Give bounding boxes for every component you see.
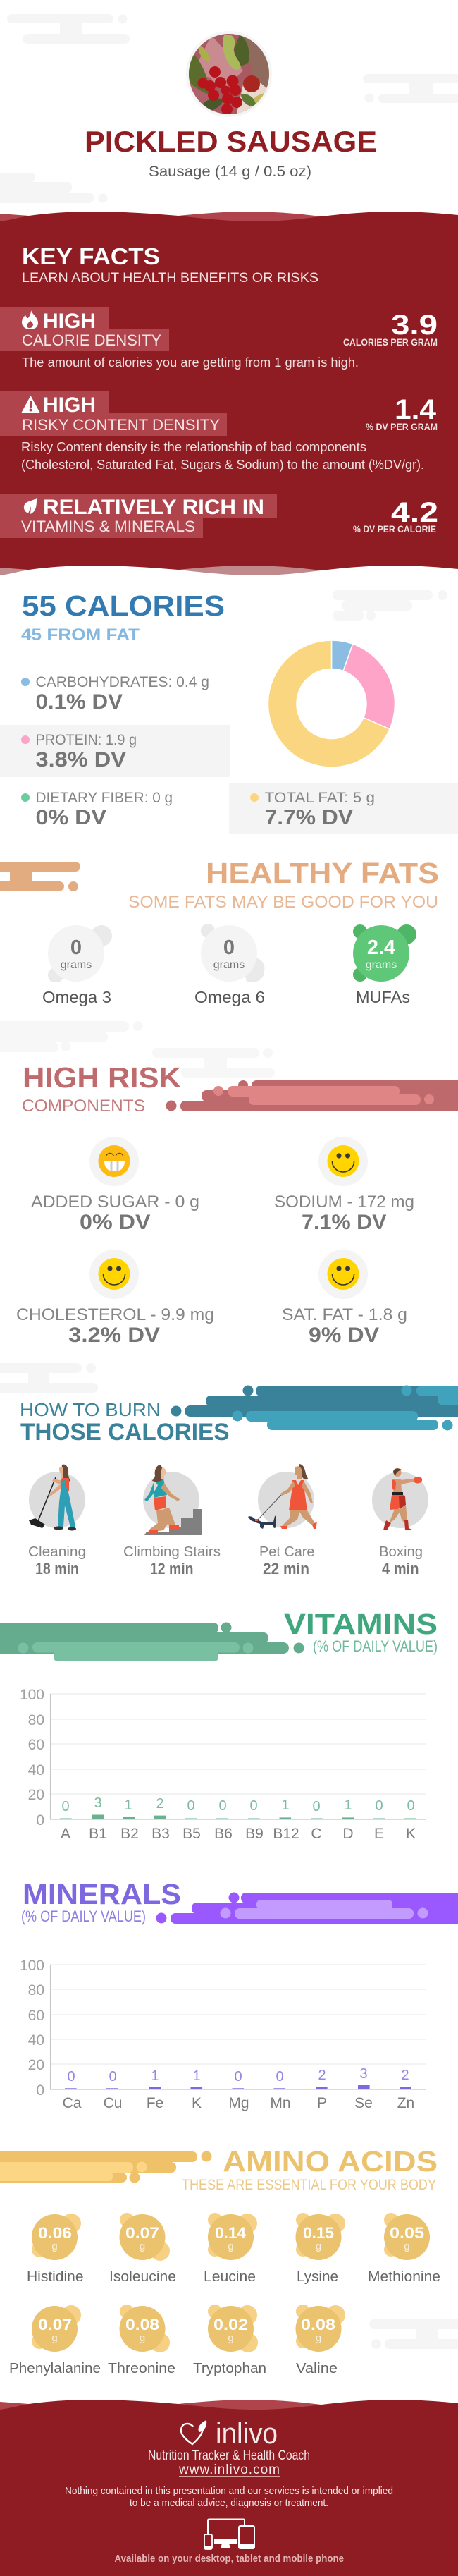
vitamins bar chart: K (406, 1826, 416, 1842)
vitamins bar chart: B5 (182, 1826, 201, 1842)
amino: tryptophan: Tryptophan (193, 2361, 266, 2376)
burn heading (20, 1399, 230, 1446)
vitamins bar chart: 0 (407, 1798, 415, 1814)
macronutrient: total fat (229, 783, 458, 834)
minerals bar chart: Se (354, 2095, 373, 2111)
amino: histidine: Histidine (27, 2269, 83, 2285)
vitamins bar chart: B9 (245, 1826, 264, 1842)
title: PICKLED SAUSAGE (85, 125, 377, 158)
fact: calorie density (0, 307, 438, 370)
sodium (274, 1137, 414, 1234)
cholesterol: CHOLESTEROL - 9.9 mg (16, 1305, 214, 1324)
fact: risky content density: % DV PER GRAM (366, 421, 438, 432)
fact: risky content density: 1.4 (395, 394, 437, 425)
fact: vitamins and minerals richness: VITAMINS & MINERALS (21, 518, 195, 535)
macronutrient: dietary fiber: DIETARY FIBER: 0 g (35, 790, 173, 806)
omega 6: 0 (223, 936, 235, 959)
vitamins bar chart: B2 (120, 1826, 139, 1842)
header background clouds (0, 14, 458, 203)
website link: www.inlivo.com (178, 2462, 280, 2477)
amino: tryptophan: 0.02 (213, 2316, 248, 2333)
fact: vitamins and minerals richness: % DV PER CALORIE (353, 523, 436, 535)
amino: methionine: Methionine (368, 2269, 440, 2285)
vitamins bar chart: 40 (28, 1762, 44, 1778)
vitamins bar chart: 0 (218, 1798, 227, 1814)
minerals bar chart (20, 1958, 426, 2111)
minerals bar chart: 100 (20, 1958, 44, 1974)
vitamins bar chart: B6 (214, 1826, 233, 1842)
amino acids heading (182, 2145, 438, 2193)
minerals bar chart: K (192, 2095, 202, 2111)
added sugar: ADDED SUGAR - 0 g (31, 1192, 199, 1211)
minerals bar chart: Fe (147, 2095, 163, 2111)
amino: leucine (204, 2213, 257, 2285)
key facts heading (22, 243, 318, 286)
vitamins bar chart: 100 (20, 1687, 44, 1703)
inlivo logo: inlivo (216, 2417, 278, 2450)
omega 3: 0 (70, 936, 82, 959)
amino: leucine: 0.14 (215, 2224, 247, 2242)
burn section background cloud (0, 1363, 98, 1393)
availability note: Available on your desktop, tablet and mobile phone (114, 2553, 344, 2565)
macronutrient: carbohydrates (21, 674, 209, 714)
amino: tryptophan: g (228, 2332, 234, 2344)
MUFAs: grams (366, 959, 397, 971)
fact: vitamins and minerals richness (0, 494, 438, 538)
activity: boxing: 4 min (382, 1560, 419, 1577)
sodium: SODIUM - 172 mg (274, 1192, 414, 1211)
vitamins bar chart: 1 (124, 1797, 132, 1813)
amino: isoleucine (109, 2213, 176, 2285)
amino acids heading: AMINO ACIDS (223, 2145, 438, 2178)
activity: climbing stairs: 12 min (150, 1560, 193, 1577)
burn heading: HOW TO BURN (20, 1399, 161, 1420)
amino: valine: g (316, 2332, 321, 2344)
vitamins bar chart: 60 (28, 1737, 44, 1753)
inlivo logo (181, 2417, 278, 2450)
MUFAs (353, 924, 416, 1006)
panel: footer (0, 2400, 458, 2576)
amino: threonine: g (140, 2332, 145, 2344)
amino: threonine: 0.08 (125, 2316, 159, 2333)
amino: phenylalanine: 0.07 (38, 2316, 72, 2333)
minerals bar chart: 60 (28, 2008, 44, 2024)
cholesterol (16, 1250, 214, 1347)
activity: boxing (372, 1468, 428, 1577)
minerals bar chart: 0 (109, 2069, 117, 2084)
activity: climbing stairs: Climbing Stairs (123, 1544, 221, 1560)
saturated fat (282, 1250, 407, 1347)
macronutrient: total fat: TOTAL FAT: 5 g (265, 790, 375, 806)
macronutrient: dietary fiber: 0% DV (35, 806, 106, 829)
fact: calorie density: 3.9 (391, 310, 438, 341)
minerals bar chart: 1 (192, 2068, 201, 2084)
high risk heading (22, 1061, 181, 1116)
amino: lysine: Lysine (297, 2269, 338, 2285)
cholesterol: 3.2% DV (68, 1324, 160, 1347)
amino: phenylalanine: Phenylalanine (9, 2361, 101, 2376)
amino: isoleucine: g (140, 2240, 145, 2252)
minerals banner cloud (156, 1893, 458, 1924)
macronutrient: protein: PROTEIN: 1.9 g (35, 732, 137, 748)
fact: vitamins and minerals richness: 4.2 (391, 497, 438, 528)
panel: key facts (0, 212, 458, 594)
fact: calorie density: CALORIES PER GRAM (343, 336, 438, 348)
activity: pet care: Pet Care (259, 1544, 314, 1560)
amino: leucine: g (228, 2240, 234, 2252)
vitamins bar chart: 0 (312, 1799, 321, 1814)
minerals bar chart: 0 (234, 2069, 242, 2084)
vitamins heading: VITAMINS (284, 1608, 438, 1640)
omega 3: grams (61, 959, 92, 971)
omega 3: Omega 3 (42, 988, 111, 1006)
minerals heading: MINERALS (23, 1878, 181, 1910)
activity: pet care (248, 1464, 317, 1577)
minerals bar chart: 0 (67, 2069, 75, 2084)
activity: climbing stairs (123, 1465, 221, 1577)
MUFAs: 2.4 (367, 936, 395, 959)
minerals bar chart: 3 (359, 2066, 368, 2082)
added sugar: 0% DV (80, 1211, 151, 1234)
panel: high risk components (16, 1061, 458, 1347)
vitamins bar chart: B1 (89, 1826, 107, 1842)
vitamins bar chart: 0 (187, 1798, 195, 1814)
amino: histidine: 0.06 (38, 2224, 72, 2242)
panel: how to burn calories (20, 1385, 458, 1577)
panel: amino acids (0, 2145, 458, 2376)
activity: cleaning: Cleaning (28, 1544, 86, 1560)
saturated fat: SAT. FAT - 1.8 g (282, 1305, 407, 1324)
macronutrient: protein: 3.8% DV (35, 748, 126, 771)
minerals bar chart: Mn (270, 2095, 291, 2111)
panel: minerals (20, 1878, 458, 2111)
macronutrient: total fat: 7.7% DV (265, 806, 353, 829)
activity: boxing: Boxing (379, 1544, 423, 1560)
amino: leucine: Leucine (204, 2269, 256, 2285)
minerals bar chart: 80 (28, 1982, 44, 1998)
calories heading (21, 590, 225, 645)
vitamins bar chart (20, 1687, 426, 1842)
serving size subtitle: Sausage (14 g / 0.5 oz) (149, 164, 311, 180)
minerals bar chart: 0 (276, 2069, 284, 2084)
vitamins bar chart: B3 (151, 1826, 170, 1842)
activity: cleaning: 18 min (35, 1560, 79, 1577)
vitamins bar chart: 1 (344, 1797, 352, 1813)
fact: vitamins and minerals richness: RELATIVELY RICH IN (43, 496, 264, 519)
added sugar (31, 1137, 199, 1234)
amino: phenylalanine (9, 2305, 101, 2376)
minerals bar chart: Ca (63, 2095, 82, 2111)
calories background cloud (333, 590, 447, 621)
minerals heading: (% OF DAILY VALUE) (21, 1907, 146, 1925)
healthy fats heading (128, 857, 439, 912)
vitamins banner cloud (0, 1622, 304, 1661)
minerals bar chart: 2 (401, 2068, 409, 2083)
healthy fats heading: SOME FATS MAY BE GOOD FOR YOU (128, 893, 438, 912)
high risk heading: COMPONENTS (22, 1097, 145, 1116)
activity: cleaning (28, 1465, 86, 1577)
minerals bar chart: P (317, 2095, 327, 2111)
donut chart (268, 640, 395, 767)
tagline: Nutrition Tracker & Health Coach (148, 2448, 310, 2463)
activity: pet care: 22 min (263, 1560, 309, 1577)
calories heading: 45 FROM FAT (21, 625, 140, 645)
macronutrient: protein (0, 725, 230, 777)
fact: risky content density: Risky Content density is the relationship of bad components (21, 440, 366, 454)
calories heading: 55 CALORIES (22, 590, 225, 622)
amino: isoleucine: Isoleucine (109, 2269, 176, 2285)
vitamins bar chart: A (61, 1826, 70, 1842)
amino: phenylalanine: g (51, 2332, 58, 2344)
fact: risky content density (0, 391, 438, 472)
panel: healthy fats (0, 857, 439, 1006)
vitamins bar chart: 3 (94, 1795, 102, 1811)
vitamins bar chart: 0 (375, 1798, 383, 1814)
healthy fats heading: HEALTHY FATS (206, 857, 439, 889)
disclaimer: to be a medical advice, diagnosis or treatment. (130, 2497, 328, 2509)
burn banner cloud (171, 1385, 458, 1430)
vitamins bar chart: 80 (28, 1712, 44, 1728)
sodium: 7.1% DV (302, 1211, 386, 1234)
vitamins bar chart: 20 (28, 1787, 44, 1803)
amino: methionine: 0.05 (390, 2224, 424, 2242)
amino background cloud (369, 2319, 458, 2349)
vitamins bar chart: 2 (156, 1796, 164, 1812)
minerals bar chart: 1 (151, 2068, 159, 2084)
amino: valine: Valine (296, 2361, 338, 2376)
omega 6 (194, 924, 265, 1006)
panel: calories (0, 590, 458, 834)
fact: risky content density: (Cholesterol, Saturated Fat, Sugars & Sodium) to the amount (%DV/gr). (21, 458, 424, 472)
amino: valine (296, 2305, 345, 2376)
vitamins bar chart: B12 (273, 1826, 299, 1842)
vitamins heading (284, 1608, 438, 1655)
food photo (186, 31, 272, 117)
minerals bar chart: 20 (28, 2057, 44, 2073)
MUFAs: MUFAs (356, 988, 410, 1006)
macronutrient: carbohydrates: CARBOHYDRATES: 0.4 g (35, 674, 209, 690)
amino: histidine (27, 2214, 83, 2285)
minerals bar chart: Cu (104, 2095, 122, 2111)
burn heading: THOSE CALORIES (20, 1419, 230, 1446)
fact: calorie density: The amount of calories you are getting from 1 gram is high. (22, 355, 359, 370)
amino: methionine (368, 2213, 440, 2285)
vitamins bar chart: 1 (281, 1797, 290, 1813)
minerals bar chart: Mg (228, 2095, 249, 2111)
high risk heading: HIGH RISK (23, 1061, 181, 1094)
vitamins bar chart: 0 (61, 1799, 70, 1814)
fact: risky content density: RISKY CONTENT DENSITY (22, 416, 220, 434)
minerals bar chart: 40 (28, 2032, 44, 2049)
saturated fat: 9% DV (309, 1324, 379, 1347)
disclaimer (65, 2485, 393, 2509)
vitamins bar chart: 0 (249, 1798, 258, 1814)
amino: histidine: g (51, 2240, 58, 2252)
minerals bar chart: 0 (36, 2082, 44, 2099)
disclaimer: Nothing contained in this presentation and our services is intended or implied (65, 2485, 393, 2497)
minerals bar chart: Zn (397, 2095, 414, 2111)
omega 6: grams (213, 959, 245, 971)
fact: risky content density: HIGH (43, 393, 96, 417)
fact: calorie density: HIGH (43, 310, 96, 333)
amino: lysine (296, 2213, 345, 2285)
omega 6: Omega 6 (194, 988, 265, 1006)
amino acids banner cloud (0, 2151, 211, 2183)
amino: valine: 0.08 (301, 2316, 335, 2333)
amino: threonine (108, 2305, 175, 2376)
amino: threonine: Threonine (108, 2361, 175, 2376)
key facts heading: KEY FACTS (22, 243, 160, 269)
omega 3 (42, 925, 112, 1006)
minerals heading (21, 1878, 181, 1925)
vitamins bar chart: 0 (36, 1812, 44, 1829)
high risk banner cloud (166, 1080, 458, 1111)
healthy fats banner cloud (0, 862, 80, 891)
amino: tryptophan (193, 2305, 266, 2376)
fact: calorie density: CALORIE DENSITY (22, 331, 161, 349)
amino: methionine: g (404, 2240, 410, 2252)
amino: lysine: g (316, 2240, 321, 2252)
icon: devices (204, 2519, 254, 2549)
panel: vitamins (0, 1608, 438, 1842)
minerals bar chart: 2 (318, 2068, 326, 2083)
vitamins bar chart: C (311, 1826, 322, 1842)
vitamins bar chart: E (374, 1826, 384, 1842)
macronutrient: carbohydrates: 0.1% DV (35, 690, 123, 714)
amino: lysine: 0.15 (303, 2224, 334, 2242)
key facts heading: LEARN ABOUT HEALTH BENEFITS OR RISKS (22, 271, 318, 286)
high risk background clouds (0, 1021, 275, 1078)
macronutrient: dietary fiber (21, 790, 173, 829)
vitamins bar chart: D (342, 1826, 354, 1842)
amino: isoleucine: 0.07 (125, 2224, 159, 2242)
